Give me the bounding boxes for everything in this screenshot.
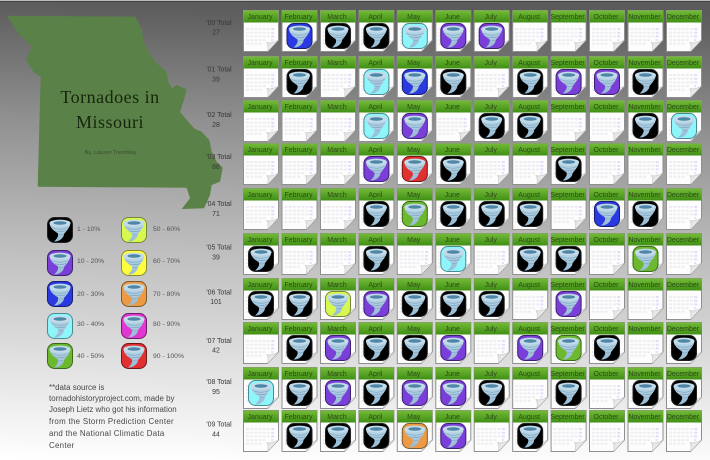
Apr 2005 [359,234,394,274]
data source note: tornadohistoryproject.com, made by [49,394,174,403]
row labels: yearly totals: '04 Total [206,201,232,208]
May 2002 [397,100,432,142]
Jun 2001: June [445,60,460,67]
May 2009: May [407,414,421,421]
legend [48,218,184,368]
title: Missouri [76,112,144,132]
Apr 2000 [359,10,394,52]
Aug 2006: August [518,282,540,289]
Apr 2003 [359,144,394,184]
Oct 2002 [590,100,624,142]
Jun 2003: June [445,147,460,154]
Apr 2008 [359,368,394,408]
Jul 2001 [474,56,509,98]
Oct 2003 [590,144,624,184]
Apr 2007 [359,322,394,364]
Nov 2003: November [628,147,661,154]
Dec 2003: December [667,147,700,154]
Sep 2004 [550,188,586,230]
Sep 2008: September [550,371,585,378]
Mar 2000: March [327,14,347,21]
legend: 50 - 60% [153,226,180,233]
Jan 2006: January [248,282,273,289]
Aug 2006 [513,278,548,320]
Oct 2007 [590,322,624,364]
Dec 2004: December [667,192,700,199]
calendar row: 2009 [244,410,702,452]
Jul 2002 [474,100,509,142]
Jan 2002 [244,100,278,142]
legend: 10 - 20% [77,258,104,265]
Sep 2001: September [550,60,585,67]
Aug 2003: August [518,147,540,154]
Jul 2000 [474,10,509,52]
May 2006: May [407,282,421,289]
row labels: yearly totals: '06 Total [206,290,232,296]
Dec 2002 [666,100,702,142]
Apr 2009: April [368,414,383,421]
May 2005 [397,234,432,274]
Oct 2005 [590,234,624,274]
Aug 2002: August [518,104,540,111]
row labels: yearly totals: '02 Total [206,112,232,119]
Sep 2008 [550,368,586,408]
Oct 2009: October [594,414,619,421]
Jan 2001 [244,56,278,98]
Feb 2001: February [284,60,313,67]
Jul 2003: July [484,147,497,154]
Nov 2003 [628,144,663,184]
Jan 2008 [244,368,278,408]
Jul 2002: July [484,104,497,111]
Nov 2009 [628,410,663,452]
Sep 2004: September [550,192,585,199]
Feb 2000 [282,10,317,52]
Sep 2002 [550,100,586,142]
May 2001 [397,56,432,98]
legend: 90 - 100% [153,353,184,360]
Aug 2001: August [518,60,540,67]
Jan 2004 [244,188,278,230]
legend: 20 - 30% [77,291,104,298]
Jan 2002: January [248,104,273,111]
Feb 2001 [282,56,317,98]
Feb 2006 [282,278,317,320]
Oct 2001 [590,56,624,98]
Feb 2003 [282,144,317,184]
row labels: yearly totals: '07 Total [206,338,232,345]
Jan 2006 [244,278,278,320]
Jan 2003 [244,144,278,184]
Oct 2000 [590,10,624,52]
row labels: yearly totals: 95 [212,389,220,396]
May 2003: May [407,147,421,154]
Oct 2002: October [594,104,619,111]
calendar row: 2005 [244,234,702,274]
row labels: yearly totals: 88 [212,164,220,171]
Feb 2007: February [284,326,313,333]
row labels: yearly totals: 28 [212,122,220,129]
Nov 2001 [628,56,663,98]
Jan 2007: January [248,326,273,333]
row labels: yearly totals: 44 [212,432,220,438]
May 2005: May [407,237,421,244]
Sep 2005 [550,234,586,274]
row labels: yearly totals: '08 Total [206,379,232,386]
Sep 2000 [550,10,586,52]
Aug 2004 [513,188,548,230]
Nov 2001: November [628,60,661,67]
row labels: yearly totals: '01 Total [206,66,232,74]
Mar 2003: March [327,147,347,154]
May 2003 [397,144,432,184]
Aug 2009 [513,410,548,452]
legend: 70 - 80% [153,291,180,298]
Aug 2000 [513,10,548,52]
Aug 2005 [513,234,548,274]
Aug 2002 [513,100,548,142]
Jul 2007: July [484,326,497,333]
Feb 2000: February [284,14,313,21]
May 2001: May [407,60,421,67]
Sep 2009 [550,410,586,452]
Nov 2008: November [628,371,661,378]
Jul 2009 [474,410,509,452]
Jul 2009: July [484,414,497,421]
Jan 2009 [244,410,278,452]
Jun 2002 [436,100,471,142]
Jun 2002: June [445,104,460,111]
Jun 2005: June [445,237,460,244]
Apr 2001 [359,56,394,98]
May 2007 [397,322,432,364]
Feb 2005: February [284,237,313,244]
Sep 2007 [550,322,586,364]
row labels: yearly totals: 39 [212,254,220,262]
calendar row: 2000 [244,10,702,52]
Dec 2007: December [667,326,700,333]
data source note [49,383,177,450]
Mar 2002 [320,100,356,142]
Jul 2000: July [484,14,497,21]
Sep 2009: September [550,414,585,421]
Oct 2001: October [594,60,619,67]
Jul 2004 [474,188,509,230]
Oct 2006: October [594,282,619,289]
Dec 2003 [666,144,702,184]
row labels: yearly totals: '09 Total [206,422,232,428]
Jul 2004: July [484,192,497,199]
Apr 2006 [359,278,394,320]
Sep 2001 [550,56,586,98]
row labels: yearly totals: 27 [212,30,220,36]
row labels: yearly totals: 39 [212,76,220,84]
Aug 2009: August [518,414,540,421]
Jun 2004: June [445,192,460,199]
Jun 2008: June [445,371,460,378]
Sep 2002: September [550,104,585,111]
Dec 2007 [666,322,702,364]
Mar 2004 [320,188,356,230]
row labels: yearly totals: 101 [210,299,222,306]
Oct 2008: October [594,371,619,378]
Sep 2006: September [550,282,585,289]
Jan 2004: January [248,192,273,199]
Mar 2002: March [327,104,347,111]
Mar 2003 [320,144,356,184]
Apr 2005: April [368,237,383,244]
Feb 2008 [282,368,317,408]
Nov 2009: November [628,414,661,421]
Mar 2008 [320,368,356,408]
Jun 2007: June [445,326,460,333]
Aug 2000: August [518,14,540,21]
Aug 2007 [513,322,548,364]
Dec 2002: December [667,104,700,111]
Oct 2008 [590,368,624,408]
Jul 2006: July [484,282,497,289]
legend: 30 - 40% [77,321,104,328]
calendar row: 2004 [244,188,702,230]
Dec 2009 [666,410,702,452]
Feb 2002 [282,100,317,142]
May 2002: May [407,104,421,111]
Jul 2005: July [484,237,497,244]
Jun 2000 [436,10,471,52]
Aug 2003 [513,144,548,184]
Mar 2009 [320,410,356,452]
Jul 2005 [474,234,509,274]
Feb 2004 [282,188,317,230]
Feb 2003: February [284,147,313,154]
Sep 2003 [550,144,586,184]
Jul 2008 [474,368,509,408]
Oct 2006 [590,278,624,320]
Jun 2001 [436,56,471,98]
data source note: and the National Climatic Data [49,429,165,438]
data source note: from the Storm Prediction Center [49,417,174,426]
Jul 2006 [474,278,509,320]
Sep 2007: September [550,326,585,333]
Dec 2004 [666,188,702,230]
Jul 2003 [474,144,509,184]
Jun 2007 [436,322,471,364]
Sep 2000: September [550,14,585,21]
Mar 2004: March [327,192,347,199]
row labels: yearly totals: 42 [212,348,220,354]
Dec 2001 [666,56,702,98]
Jun 2006: June [445,282,460,289]
Apr 2001: April [368,60,383,67]
Nov 2002 [628,100,663,142]
Nov 2006: November [628,282,661,289]
calendar row: 2001 [244,56,702,98]
Nov 2005: November [628,237,661,244]
May 2008: May [407,371,421,378]
Jan 2005: January [248,237,273,244]
row labels: yearly totals: '03 Total [206,154,232,161]
Nov 2000: November [628,14,661,21]
Dec 2009: December [667,414,700,421]
row labels: yearly totals: '05 Total [206,244,232,252]
Oct 2005: October [594,237,619,244]
calendar row: 2008 [244,368,702,408]
Mar 2005 [320,234,356,274]
byline: By, Lauren Tremblay [84,150,137,156]
row labels: yearly totals [206,20,232,438]
May 2007: May [407,326,421,333]
Mar 2001 [320,56,356,98]
Apr 2008: April [368,371,383,378]
Jun 2009 [436,410,471,452]
Jun 2005 [436,234,471,274]
Jan 2008: January [248,371,273,378]
Apr 2004: April [368,192,383,199]
calendar row: 2006 [244,278,702,320]
May 2008 [397,368,432,408]
Jan 2001: January [248,60,273,67]
Apr 2004 [359,188,394,230]
May 2000 [397,10,432,52]
title [60,87,160,132]
Dec 2000 [666,10,702,52]
Dec 2000: December [667,14,700,21]
Nov 2008 [628,368,663,408]
Feb 2005 [282,234,317,274]
Sep 2005: September [550,237,585,244]
legend: 80 - 90% [153,321,180,328]
Dec 2005 [666,234,702,274]
Mar 2009: March [327,414,347,421]
Dec 2001: December [667,60,700,67]
Oct 2003: October [594,147,619,154]
Apr 2007: April [368,326,383,333]
data source note: **data source is [49,383,104,392]
data source note: Center [49,441,75,450]
Jun 2003 [436,144,471,184]
Feb 2009 [282,410,317,452]
Jan 2009: January [248,414,273,421]
calendar row: 2007 [244,322,702,364]
Apr 2002 [359,100,394,142]
Jun 2009: June [445,414,460,421]
Jun 2004 [436,188,471,230]
Apr 2009 [359,410,394,452]
Nov 2007 [628,322,663,364]
Oct 2009 [590,410,624,452]
Aug 2004: August [518,192,540,199]
Mar 2007: March [327,326,347,333]
Feb 2002: February [284,104,313,111]
legend: 1 - 10% [77,226,100,233]
Nov 2005 [628,234,663,274]
legend: 60 - 70% [153,258,180,265]
Nov 2004 [628,188,663,230]
Apr 2000: April [368,14,383,21]
Feb 2006: February [284,282,313,289]
Aug 2005: August [518,237,540,244]
Nov 2002: November [628,104,661,111]
legend: 40 - 50% [77,353,104,360]
Mar 2005: March [327,237,347,244]
row labels: yearly totals: '00 Total [206,20,232,27]
Jan 2000: January [248,14,273,21]
Jun 2006 [436,278,471,320]
Dec 2008 [666,368,702,408]
title: Tornadoes in [60,87,160,107]
Mar 2000 [320,10,356,52]
Aug 2008 [513,368,548,408]
Nov 2000 [628,10,663,52]
Dec 2008: December [667,371,700,378]
Nov 2004: November [628,192,661,199]
Mar 2006 [320,278,356,320]
Feb 2008: February [284,371,313,378]
Jun 2008 [436,368,471,408]
Jan 2005 [244,234,278,274]
Nov 2006 [628,278,663,320]
Aug 2001 [513,56,548,98]
data source note: Joseph Lietz who got his information [49,405,177,414]
Jan 2003: January [248,147,273,154]
Jul 2001: July [484,60,497,67]
Jun 2000: June [445,14,460,21]
Oct 2007: October [594,326,619,333]
Aug 2008: August [518,371,540,378]
Dec 2006: December [667,282,700,289]
May 2004 [397,188,432,230]
Nov 2007: November [628,326,661,333]
calendar row: 2002 [244,100,702,142]
Sep 2003: September [550,147,585,154]
Apr 2006: April [368,282,383,289]
Jan 2000 [244,10,278,52]
Dec 2005: December [667,237,700,244]
Oct 2004 [590,188,624,230]
Mar 2008: March [327,371,347,378]
calendar row: 2003 [244,144,702,184]
Mar 2007 [320,322,356,364]
map: state of Missouri [7,16,223,209]
Feb 2004: February [284,192,313,199]
Sep 2006 [550,278,586,320]
Jul 2007 [474,322,509,364]
May 2006 [397,278,432,320]
Oct 2004: October [594,192,619,199]
Aug 2007: August [518,326,540,333]
Jul 2008: July [484,371,497,378]
Dec 2006 [666,278,702,320]
row labels: yearly totals: 71 [212,211,220,218]
Feb 2009: February [284,414,313,421]
May 2000: May [407,14,421,21]
May 2009 [397,410,432,452]
Apr 2003: April [368,147,383,154]
Apr 2002: April [368,104,383,111]
May 2004: May [407,192,421,199]
Mar 2001: March [327,60,347,67]
Oct 2000: October [594,14,619,21]
Feb 2007 [282,322,317,364]
Jan 2007 [244,322,278,364]
Mar 2006: March [327,282,347,289]
